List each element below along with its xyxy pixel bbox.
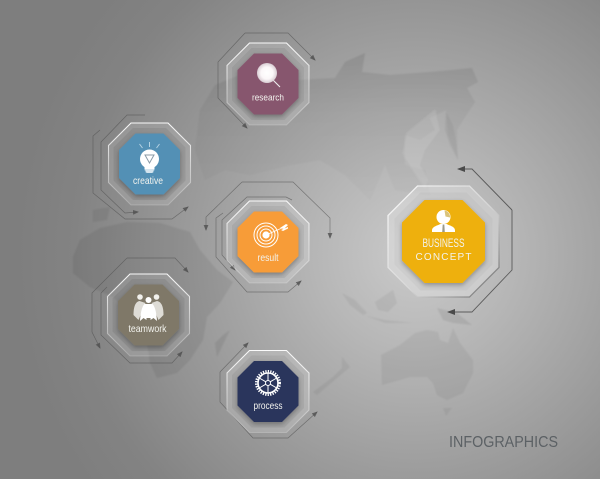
- panel: process: [227, 350, 309, 432]
- arrow: process top: [220, 343, 248, 372]
- map: Madagascar: [215, 330, 230, 357]
- glass frame: [388, 186, 499, 297]
- arrow: teamwork left: [92, 258, 127, 348]
- arrow: research top: [245, 33, 315, 60]
- panel: creative: [108, 123, 190, 205]
- arrow: teamwork top: [127, 258, 188, 272]
- research badge: [238, 54, 298, 114]
- map: New Guinea: [437, 308, 472, 325]
- label: process: process: [254, 400, 282, 412]
- arrow: business bottom: [448, 210, 512, 312]
- label: business: BUSINESS: [422, 238, 465, 250]
- arrow: teamwork bottom: [101, 287, 182, 363]
- creative badge: [119, 134, 180, 194]
- map: Borneo: [375, 290, 397, 312]
- icon: magnifier: [257, 63, 280, 87]
- label: research: research: [252, 92, 284, 104]
- title: infographics: INFOGRAPHICS: [449, 434, 558, 451]
- map: Eurasia: [195, 53, 478, 200]
- process badge: [238, 361, 298, 422]
- glass frame: [227, 350, 309, 432]
- panel: research: [227, 43, 309, 125]
- glass frame: [108, 123, 190, 205]
- label: creative: creative: [133, 175, 163, 187]
- map: Sumatra: [342, 293, 367, 315]
- arrow: result inner: [222, 197, 292, 270]
- teamwork badge: [118, 284, 179, 346]
- icon: target: [254, 223, 288, 247]
- arrow: result bottom: [216, 213, 301, 292]
- glass frame: [227, 201, 309, 283]
- label: result: result: [258, 252, 279, 264]
- arrow: result top right: [242, 182, 330, 238]
- glass frame: [227, 43, 309, 125]
- glass frame: [108, 274, 190, 356]
- arrow: research left: [218, 33, 247, 128]
- map: South-East Asia highlight: [403, 110, 440, 188]
- business badge: [402, 200, 485, 283]
- arrow: creative outer: [93, 130, 188, 219]
- map: Africa: [73, 222, 233, 378]
- label: concept: CONCEPT: [416, 252, 472, 263]
- map: Europe fragment: [93, 207, 110, 222]
- panel: teamwork: [108, 274, 190, 356]
- arrow: process bottom: [220, 372, 317, 438]
- map: Korea and Japan: [445, 112, 458, 160]
- panel: result: [227, 201, 309, 283]
- world map: [73, 53, 478, 416]
- result badge: [238, 212, 298, 272]
- map: Tasmania: [443, 408, 452, 416]
- map: New Zealand: [313, 357, 350, 395]
- icon: gear: [256, 371, 280, 395]
- arrow: result top left: [206, 182, 242, 230]
- map: Java: [366, 316, 413, 323]
- connector lines: [92, 33, 512, 438]
- icon: team of people: [134, 294, 164, 321]
- icon: light bulb: [140, 142, 160, 173]
- arrow: business top: [458, 169, 512, 210]
- arrow: creative inner: [101, 115, 145, 213]
- icon: business person: [432, 210, 455, 232]
- map: Australia: [381, 328, 473, 400]
- label: teamwork: teamwork: [128, 323, 167, 335]
- panel: business concept: [388, 186, 499, 297]
